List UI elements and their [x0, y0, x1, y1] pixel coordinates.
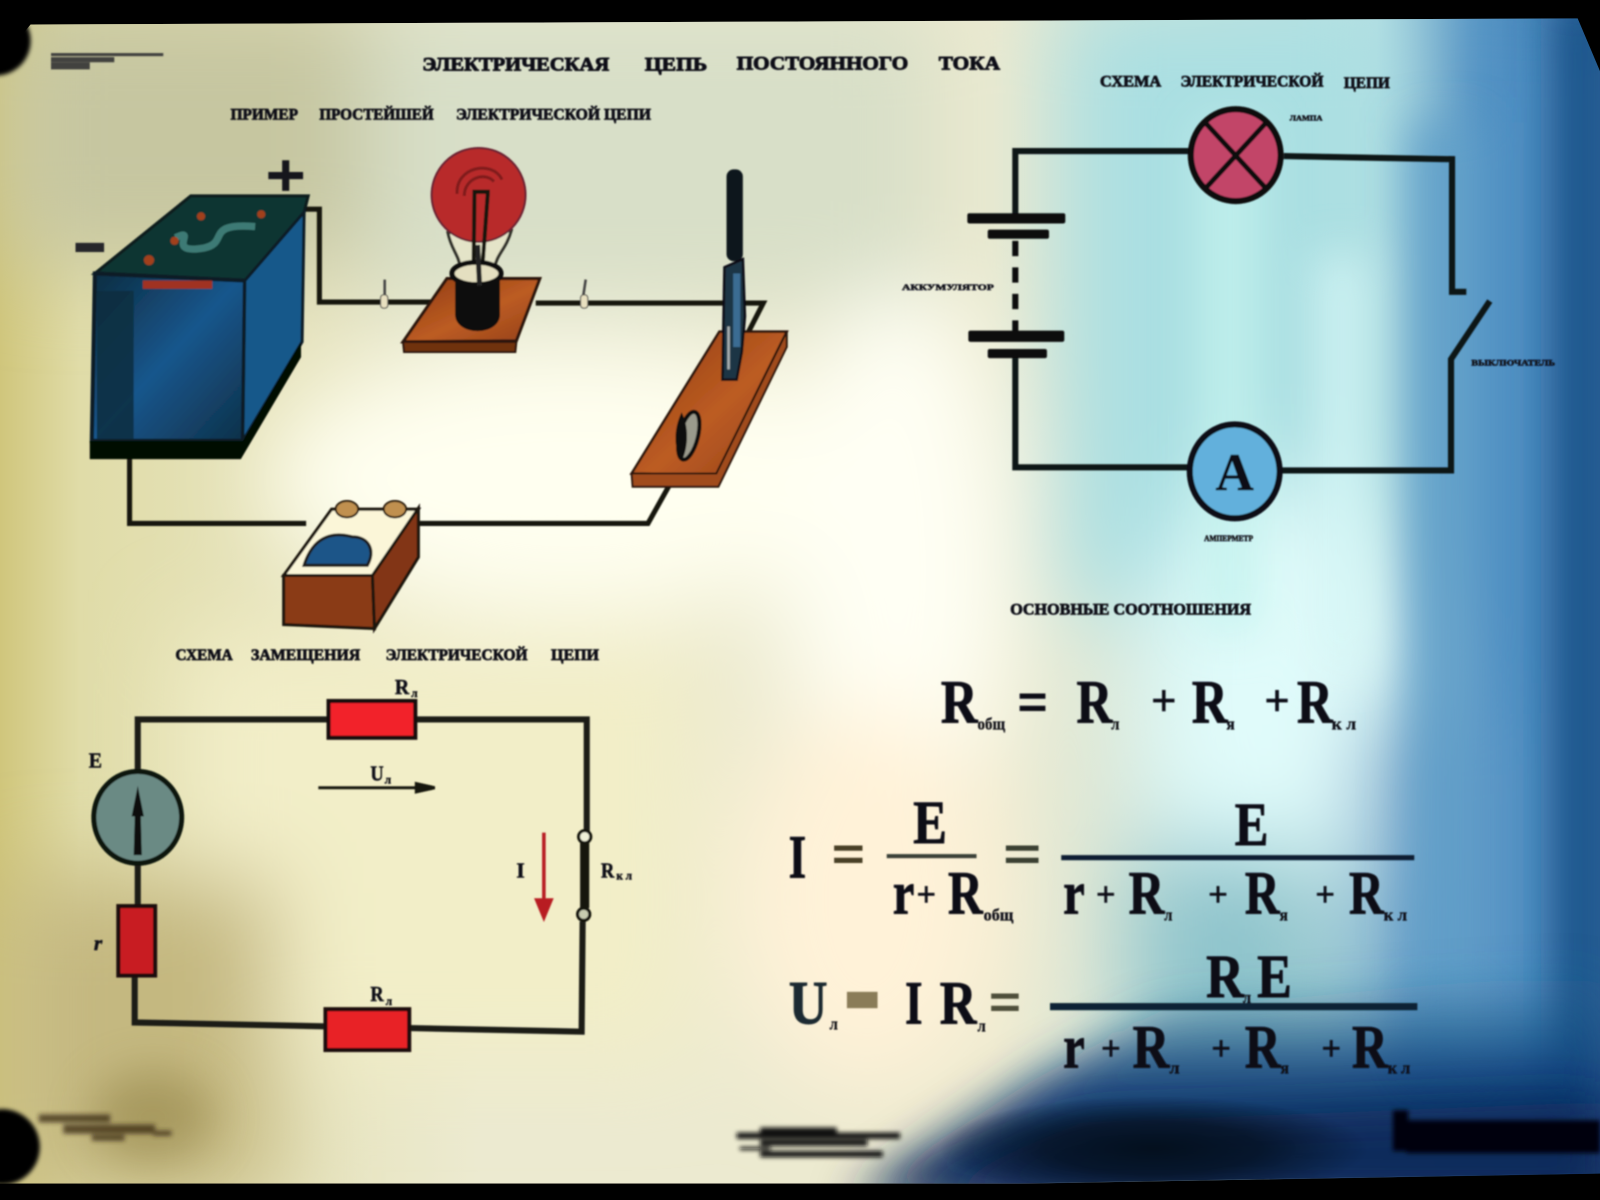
resistor top: [329, 701, 415, 738]
label R top: R: [395, 675, 410, 699]
schematic circuit: [902, 109, 1556, 543]
formula: voltage: л: [978, 1017, 986, 1036]
heading: example circuit: ПРОСТЕЙШЕЙ: [319, 106, 434, 123]
title: ПОСТОЯННОГО: [737, 53, 908, 74]
wire clips: [381, 280, 588, 308]
title: [422, 53, 1000, 75]
formula: current: +: [1096, 875, 1116, 914]
icon: ammeter device: [284, 501, 418, 629]
schematic wires: [1015, 151, 1490, 470]
heading: example circuit: [231, 106, 651, 123]
label R top subscript: л: [411, 688, 418, 700]
title: ТОКА: [939, 53, 1000, 74]
formula: total resistance: R: [941, 668, 978, 736]
formula: voltage: [789, 943, 1417, 1081]
load terminals: [578, 831, 591, 920]
formula: current: R: [948, 859, 983, 927]
equivalent circuit: [89, 675, 632, 1050]
label: switch: ВЫКЛЮЧАТЕЛЬ: [1471, 358, 1556, 367]
plus sign: [268, 160, 303, 191]
label R bottom subscript: л: [386, 996, 392, 1008]
heading: example circuit: ЭЛЕКТРИЧЕСКОЙ ЦЕПИ: [456, 106, 651, 123]
formula: total resistance: R: [1192, 668, 1228, 736]
formula: total resistance: общ: [978, 715, 1005, 734]
heading: equivalent circuit: ЭЛЕКТРИЧЕСКОЙ: [386, 647, 528, 664]
heading: example circuit: ПРИМЕР: [231, 106, 298, 123]
heading: schematic: ЭЛЕКТРИЧЕСКОЙ: [1181, 74, 1324, 91]
formula: total resistance: +: [1151, 675, 1177, 725]
formula: current: R: [1349, 859, 1384, 927]
heading: equivalent circuit: СХЕМА: [176, 647, 233, 664]
formula: current: я: [1280, 905, 1288, 924]
label: accumulator: АККУМУЛЯТОР: [902, 283, 994, 292]
formula: current: R: [1245, 859, 1280, 927]
heading: schematic: [1100, 74, 1390, 92]
formula: current: +: [1208, 875, 1228, 914]
formula: voltage: R: [1133, 1013, 1170, 1081]
label U: U: [370, 762, 384, 786]
formula: current: к л: [1384, 905, 1407, 924]
resistor bottom: [326, 1009, 409, 1050]
formula: voltage: +: [1101, 1029, 1121, 1068]
dark label block bottom right: [1393, 1110, 1600, 1153]
heading: equivalent circuit: [176, 647, 599, 664]
formula: total resistance: я: [1227, 715, 1235, 734]
ammeter symbol: [1190, 424, 1280, 518]
formula: current: E: [1235, 791, 1268, 859]
formula: total resistance: л: [1111, 715, 1120, 734]
label: lamp: ЛАМПА: [1290, 114, 1323, 122]
formula: voltage: я: [1281, 1058, 1289, 1077]
punched holes at the corners: [0, 6, 31, 76]
current arrow: [537, 833, 551, 917]
formula: voltage: R: [1206, 943, 1245, 1011]
formula: total resistance: [941, 668, 1356, 736]
formula: voltage: л: [830, 1015, 838, 1034]
formula: voltage: +: [1321, 1029, 1341, 1068]
formula: current: R: [1129, 859, 1165, 927]
icon: knife switch: [632, 169, 787, 487]
formula: current: r: [893, 859, 914, 927]
minus sign: [76, 243, 104, 252]
lamp symbol: [1191, 109, 1281, 201]
publisher note top left: [51, 53, 163, 69]
publisher imprint bottom left: [39, 1114, 171, 1141]
formula: voltage: =: [989, 968, 1021, 1036]
formula: total resistance: к л: [1332, 715, 1356, 734]
formula: voltage: R: [1352, 1013, 1388, 1081]
formula: current: +: [916, 875, 936, 914]
formula: current: E: [913, 789, 947, 857]
formula: voltage: I: [905, 969, 922, 1037]
formula: current: л: [1164, 905, 1173, 924]
heading: schematic: ЦЕПИ: [1344, 75, 1390, 92]
icon: battery: [90, 196, 308, 459]
formula: current: =: [832, 820, 865, 888]
formula: voltage: к л: [1388, 1058, 1410, 1077]
formula: voltage: +: [1211, 1029, 1231, 1068]
heading: equivalent circuit: ЗАМЕЩЕНИЯ: [251, 647, 360, 664]
formula: voltage: U: [789, 969, 828, 1037]
label r: r: [94, 931, 103, 955]
formula: voltage: R: [1245, 1013, 1281, 1081]
formula: current: общ: [984, 905, 1014, 924]
formula: total resistance: R: [1297, 668, 1333, 736]
title: ЭЛЕКТРИЧЕСКАЯ: [422, 54, 609, 75]
formula: current: =: [1003, 820, 1042, 888]
formula: total resistance: =: [1017, 668, 1048, 736]
imprint bottom centre: [737, 1128, 900, 1157]
formula: voltage: E: [1257, 943, 1292, 1011]
icon: light bulb on base: [403, 148, 540, 352]
label R bottom: R: [370, 982, 384, 1006]
formula: voltage: R: [940, 969, 977, 1037]
battery symbol: [967, 213, 1065, 358]
voltage arrow: [318, 784, 435, 792]
source circle: [94, 771, 182, 863]
label R load subscript: к л: [616, 871, 632, 883]
formula: current: r: [1063, 859, 1085, 927]
label E: E: [89, 748, 102, 772]
formula: current: +: [1315, 875, 1335, 914]
heading: schematic: СХЕМА: [1100, 74, 1161, 91]
ammeter symbol: A: [1216, 444, 1254, 502]
formula: voltage: л: [1243, 988, 1251, 1007]
formula: current: [789, 789, 1414, 927]
formula: total resistance: R: [1077, 668, 1113, 736]
label U subscript: л: [385, 775, 391, 787]
circuit wires: [135, 719, 587, 1032]
title: ЦЕПЬ: [645, 54, 707, 75]
heading: equivalent circuit: ЦЕПИ: [551, 647, 599, 664]
formula: voltage: л: [1169, 1058, 1180, 1077]
formula: voltage: r: [1063, 1013, 1085, 1081]
formula: current: I: [789, 824, 806, 892]
label: ammeter: АМПЕРМЕТР: [1204, 534, 1253, 543]
label I: I: [516, 859, 525, 883]
heading: relations: ОСНОВНЫЕ СООТНОШЕНИЯ: [1010, 601, 1251, 618]
label R load: R: [601, 859, 615, 883]
formula: total resistance: +: [1264, 675, 1290, 725]
internal resistance: [118, 906, 155, 976]
wires of pictorial circuit: [130, 209, 763, 523]
